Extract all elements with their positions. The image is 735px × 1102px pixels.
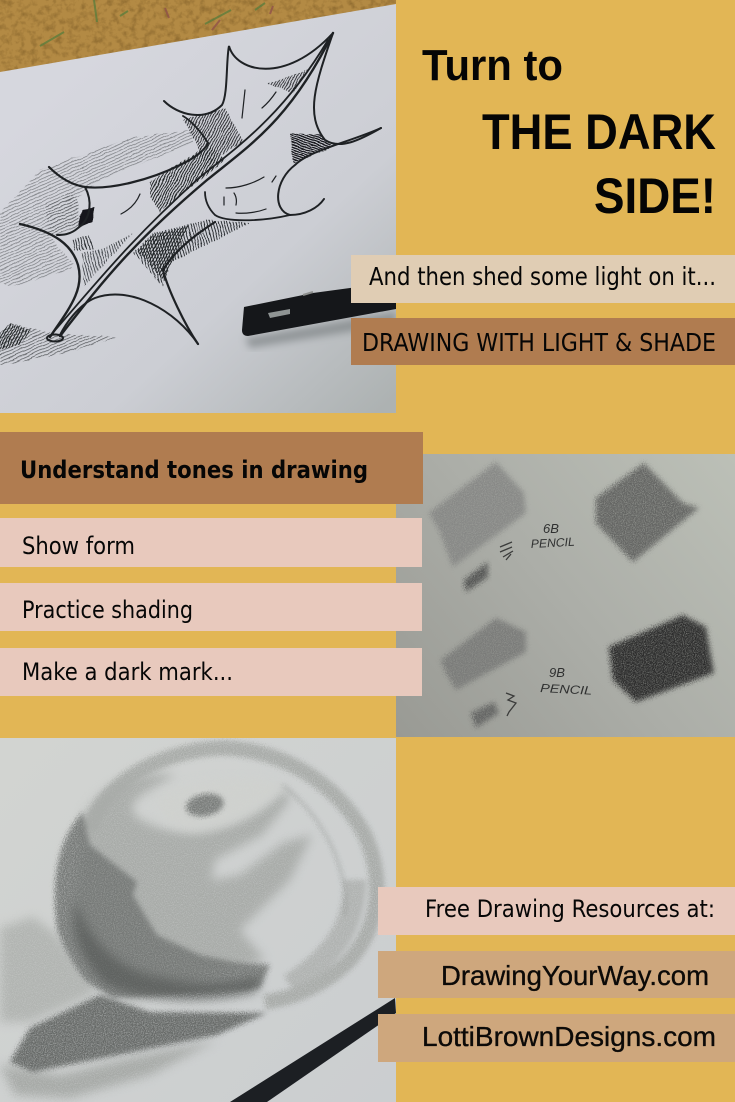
photo: pencil tone swatches [396,454,735,737]
list item: show form: Show form [22,532,135,560]
title line: THE DARK: THE DARK [482,104,716,160]
sphere shaded body [55,812,270,998]
banner: LottiBrownDesigns.com: LottiBrownDesigns.com [422,1021,716,1052]
heading bar: understand tones: Understand tones in drawing [20,456,368,484]
cast shadow hatching [0,130,193,365]
cast shadow of sphere [10,995,267,1072]
photo: shaded pencil sphere [0,738,396,1102]
handwritten label: 9B pencil: 9B [549,665,565,680]
swatch paper [396,454,735,737]
sphere outer rings [90,748,377,1002]
list item: show form [0,518,422,567]
banner: drawing with light and shade [351,318,735,365]
banner: free drawing resources [378,887,735,935]
title line: Turn to: Turn to [422,41,563,90]
9B dark swatch [609,615,714,702]
list item: make a dark mark: Make a dark mark... [22,658,233,686]
list item: practice shading: Practice shading [22,596,193,624]
handwritten label: 6B pencil [530,521,575,551]
banner: shed some light [351,255,735,303]
9B light swatch [441,618,526,690]
handwritten label: 9B pencil: PENCIL [540,681,593,698]
holly leaf outline and veins [20,33,381,344]
title line: SIDE!: SIDE! [594,168,716,224]
sphere dark crescent [74,900,262,999]
6B light swatch [429,462,526,567]
pen shadow [245,312,396,348]
list item: practice shading [0,583,422,631]
dark hole on top [184,791,226,819]
black pencil [230,998,396,1102]
6B small test patch [464,562,488,592]
banner: DrawingYourWay.com [378,951,735,998]
6B dark swatch [596,463,699,562]
hatching inside the leaf [72,70,333,287]
sphere mid-tone shading [70,774,312,1000]
photo: ink holly leaf [0,0,396,413]
handwritten label: 6B pencil: 6B [543,521,559,536]
title [422,41,716,224]
fineliner pen [242,282,396,336]
banner: DrawingYourWay.com: DrawingYourWay.com [441,960,709,991]
handwritten label: 9B pencil [540,665,593,698]
list item: make a dark mark [0,648,422,696]
heading bar: understand tones [0,432,423,504]
painted table top [0,0,396,73]
paper sheet [0,0,396,413]
tick squiggles [500,542,516,716]
sphere paper highlight [157,778,283,832]
sphere paper [0,738,396,1102]
banner: LottiBrownDesigns.com [378,1014,735,1062]
handwritten label: 6B pencil: PENCIL [530,535,575,551]
pale shadow area [0,917,217,1098]
9B small test patch [471,702,499,728]
